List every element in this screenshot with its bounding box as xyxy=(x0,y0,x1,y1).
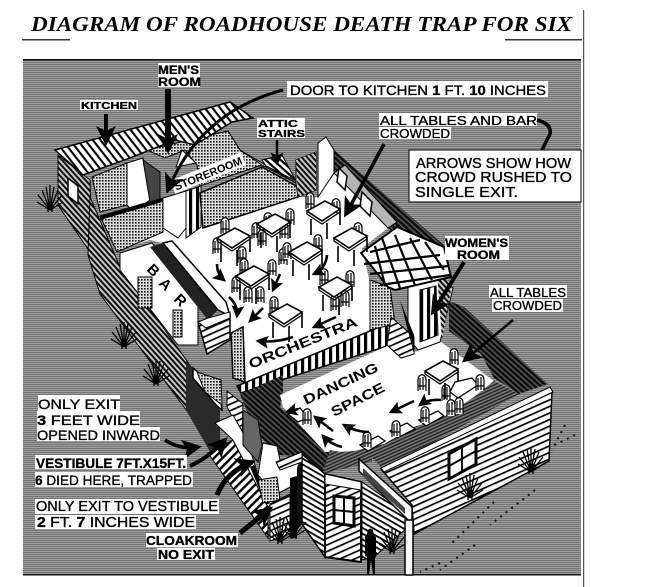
exit doorway wall xyxy=(193,368,222,410)
porch overhang xyxy=(276,452,302,470)
bar lettering: R xyxy=(170,291,190,311)
bar back area xyxy=(120,243,198,345)
label: vestibule xyxy=(35,440,225,488)
label: all tables and bar crowded xyxy=(346,113,537,214)
white stub wall xyxy=(318,137,334,197)
label: men's room xyxy=(158,63,201,150)
women's room front wall xyxy=(370,280,395,330)
label: only exit to vestibule xyxy=(35,462,252,531)
shrubs xyxy=(37,185,544,554)
storeroom label: STOREROOM xyxy=(173,155,244,193)
south band xyxy=(334,381,519,470)
bar curved end xyxy=(198,314,230,354)
east bay side siding xyxy=(362,482,408,560)
column rule xyxy=(583,10,584,587)
southeast siding wall xyxy=(381,387,553,534)
west partition wall xyxy=(100,198,163,252)
kitchen window xyxy=(68,178,78,204)
label: women's room: WOMEN'S xyxy=(445,238,508,250)
dark door posts xyxy=(243,410,262,462)
ground footprints xyxy=(420,425,575,572)
callout: arrows: CROWD RUSHED TO xyxy=(415,169,572,186)
bar lettering xyxy=(143,261,190,311)
sign board xyxy=(359,459,413,575)
floor label: dancing space xyxy=(301,359,387,420)
label: men's room: MEN'S xyxy=(158,65,199,77)
label: door to kitchen: DOOR TO KITCHEN 1 FT. 10 INCHES xyxy=(290,82,546,98)
floor label: dancing space: DANCING xyxy=(301,359,381,408)
panel: gray background xyxy=(23,59,581,576)
callout: arrows: ARROWS SHOW HOW xyxy=(416,155,572,172)
door kitchen xyxy=(143,160,160,202)
main floor xyxy=(120,158,388,384)
floor label: orchestra: ORCHESTRA xyxy=(246,313,360,372)
label: kitchen xyxy=(80,100,138,142)
label: vestibule: VESTIBULE 7FT.X15FT. xyxy=(36,455,186,471)
white space by cloakroom xyxy=(258,443,303,495)
label: all tables crowded xyxy=(465,285,567,360)
storeroom white roof xyxy=(176,150,196,167)
label: kitchen: KITCHEN xyxy=(81,100,137,112)
kitchen side wall xyxy=(58,155,92,255)
label: all tables and bar crowded: CROWDED xyxy=(380,126,450,141)
long back wall xyxy=(200,167,298,228)
orchestra railing xyxy=(237,324,387,393)
kitchen roof xyxy=(55,102,253,175)
pillar xyxy=(231,327,245,382)
tree trunk xyxy=(290,476,297,538)
label: women's room xyxy=(433,236,509,312)
label: attic stairs: STAIRS xyxy=(258,128,305,140)
label: all tables and bar crowded: ALL TABLES AND BAR xyxy=(380,113,537,128)
man silhouette xyxy=(365,529,376,574)
label: men's room: ROOM xyxy=(158,77,201,89)
label: only exit to vestibule: 2 FT. 7 INCHES WIDE xyxy=(37,515,195,531)
label: only exit xyxy=(37,395,198,448)
floor label: dancing space: SPACE xyxy=(328,379,387,420)
tile roof xyxy=(361,227,451,290)
building: roadhouse cutaway xyxy=(55,102,553,575)
bar pillars xyxy=(138,277,182,337)
label: attic stairs xyxy=(257,118,305,163)
white door gap xyxy=(127,158,150,212)
kitchen wall stipple xyxy=(92,163,127,212)
label: cloakroom: NO EXIT xyxy=(158,548,214,562)
bay front xyxy=(325,474,361,562)
label: only exit: 3 FEET WIDE xyxy=(37,412,140,428)
callout: arrows xyxy=(409,150,581,202)
northeast wall with windows xyxy=(322,141,451,278)
white passage xyxy=(215,415,280,507)
label: attic stairs: ATTIC xyxy=(258,118,299,130)
label: door to kitchen xyxy=(168,81,548,190)
label: cloakroom: CLOAKROOM xyxy=(146,534,237,548)
west dark planting xyxy=(186,360,220,455)
women's room xyxy=(361,227,453,358)
title: DIAGRAM OF ROADHOUSE DEATH TRAP FOR SIX xyxy=(30,12,573,36)
squiggle leader xyxy=(537,120,550,150)
storeroom back wall xyxy=(147,131,262,186)
callout: arrows: SINGLE EXIT. xyxy=(415,184,518,201)
attic stairs wall xyxy=(240,150,316,197)
label: women's room: ROOM xyxy=(457,250,500,262)
dance floor edge tables xyxy=(288,398,463,451)
dark band west of dance floor xyxy=(240,375,335,476)
stairs to women's room xyxy=(387,317,414,358)
label: only exit: OPENED INWARD xyxy=(37,427,160,443)
bar lettering: B xyxy=(143,261,163,281)
dance floor xyxy=(280,342,494,452)
crowd flow arrows xyxy=(217,255,441,447)
cloakroom wall xyxy=(270,494,290,541)
bar counter xyxy=(163,241,230,316)
storeroom door block xyxy=(163,191,186,238)
label: cloakroom xyxy=(146,509,270,562)
east dark wall xyxy=(449,301,548,394)
stairs left xyxy=(227,391,243,434)
west long wall xyxy=(88,197,217,452)
bar back shelf xyxy=(150,243,218,320)
bay wall left xyxy=(302,454,325,557)
label: only exit: ONLY EXIT xyxy=(38,396,121,412)
label: vestibule: 6 DIED HERE, TRAPPED xyxy=(35,472,192,488)
bar lettering: A xyxy=(155,275,175,295)
label: all tables crowded: CROWDED xyxy=(493,298,562,313)
vestibule siding xyxy=(208,440,268,538)
label: all tables crowded: ALL TABLES xyxy=(490,285,566,300)
label: only exit to vestibule: ONLY EXIT TO VESTIBULE xyxy=(36,499,218,515)
tables on main floor xyxy=(213,193,484,401)
